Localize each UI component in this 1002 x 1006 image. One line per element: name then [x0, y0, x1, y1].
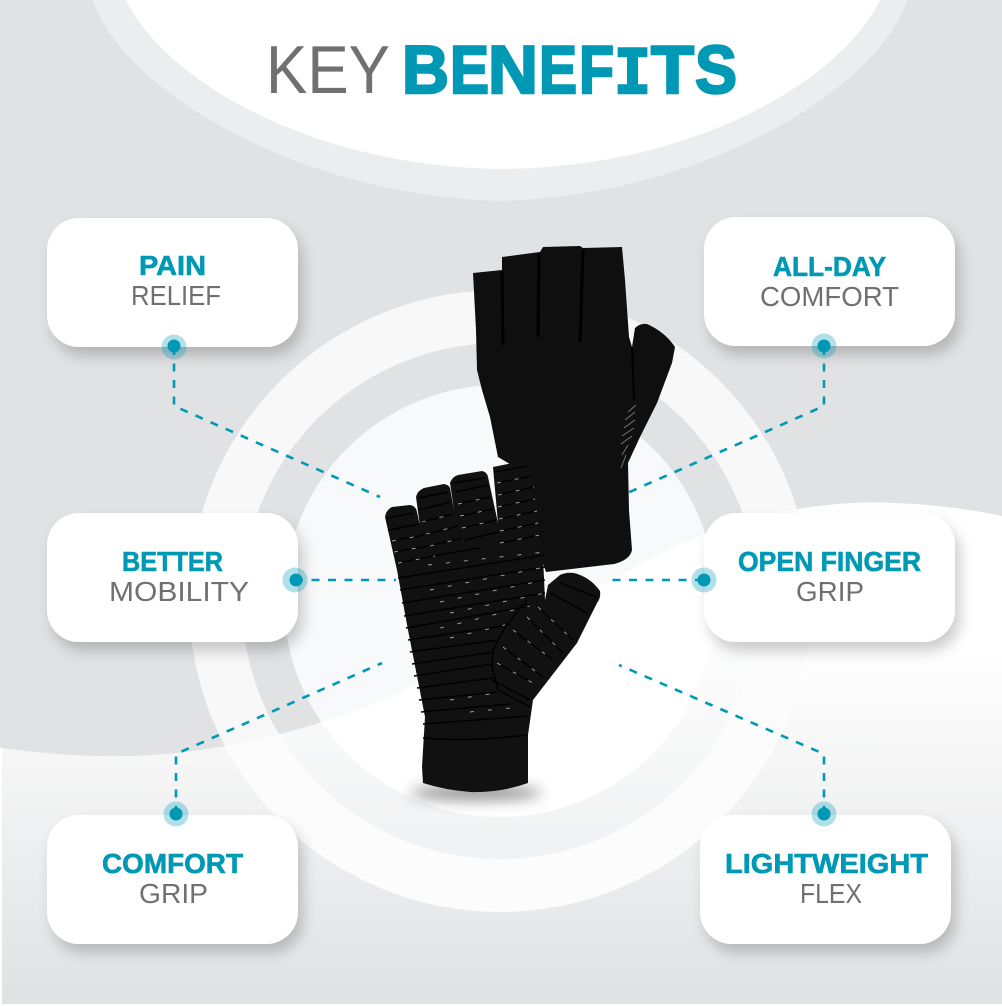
connector: better mobility: [282, 568, 396, 592]
connector: open finger grip: [605, 568, 716, 592]
card: comfort grip: GRIP: [139, 878, 208, 909]
card: lightweight flex: LIGHTWEIGHT: [725, 848, 928, 879]
card: pain relief: [47, 218, 298, 347]
card: comfort grip: COMFORT: [102, 848, 243, 879]
card: lightweight flex: FLEX: [800, 878, 862, 909]
connector: pain relief: [162, 334, 380, 497]
title: E: [539, 32, 577, 108]
icon: back glove: [473, 246, 675, 572]
card: all-day comfort: ALL-DAY: [773, 251, 886, 282]
title: KEY: [266, 32, 390, 108]
card: better mobility: BETTER: [122, 546, 223, 577]
icon: front glove: [385, 460, 600, 800]
card: better mobility: MOBILITY: [109, 576, 249, 607]
card: better mobility: [47, 513, 298, 642]
card: comfort grip: [47, 815, 298, 944]
title: I: [614, 37, 651, 114]
title: T: [651, 32, 694, 108]
title: [266, 32, 737, 114]
title: N: [488, 32, 538, 108]
connector: all-day comfort: [625, 334, 836, 494]
card: open finger grip: GRIP: [796, 576, 864, 607]
card: all-day comfort: COMFORT: [760, 281, 899, 312]
connector: comfort grip: [164, 663, 382, 826]
card: all-day comfort: [704, 217, 955, 346]
title: F: [579, 32, 614, 108]
title: E: [450, 32, 489, 108]
card: pain relief: PAIN: [139, 250, 206, 281]
card: lightweight flex: [700, 815, 951, 944]
title: S: [695, 32, 737, 108]
card: open finger grip: OPEN FINGER: [738, 546, 921, 577]
title: B: [402, 32, 449, 108]
palm stripes: [387, 466, 597, 739]
card: open finger grip: [704, 513, 955, 642]
card: pain relief: RELIEF: [131, 280, 221, 311]
connector: lightweight flex: [619, 665, 836, 826]
